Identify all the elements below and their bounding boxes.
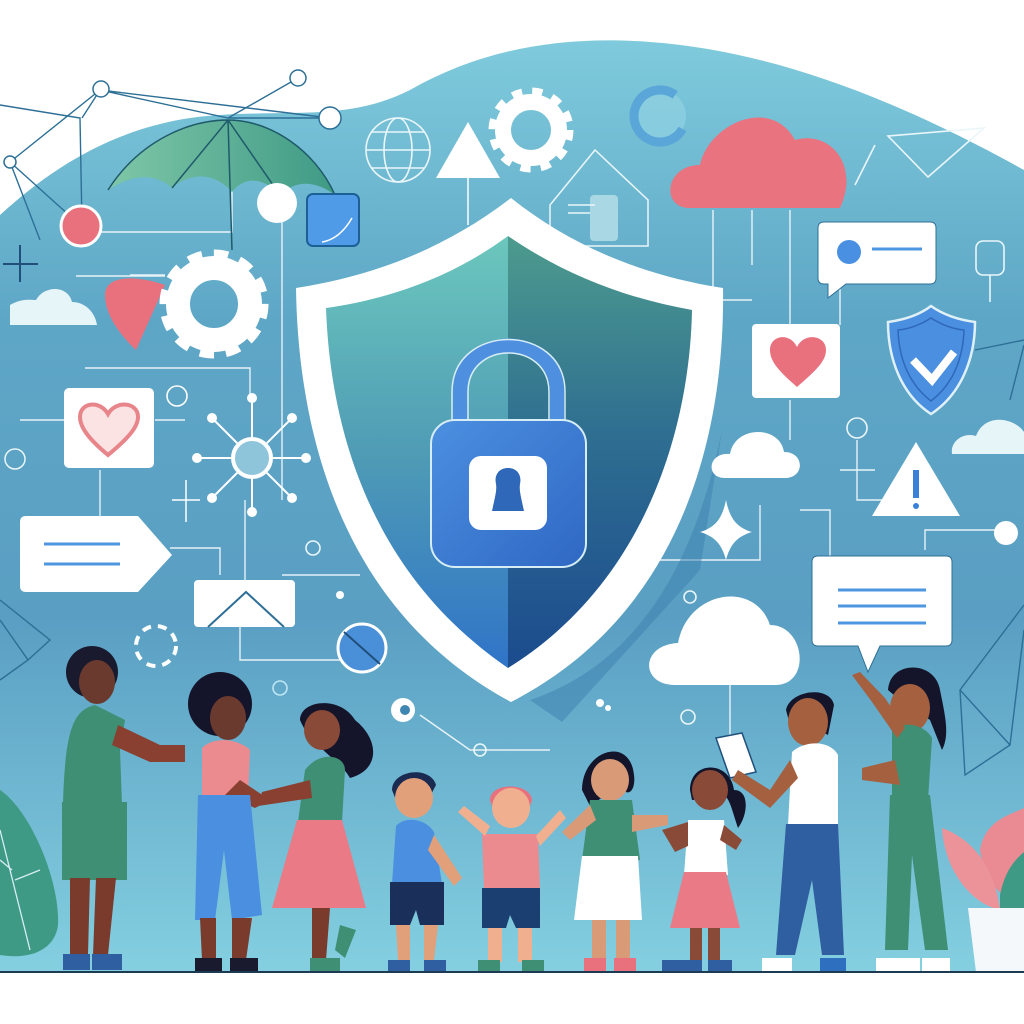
person 3: [258, 703, 373, 972]
icon: large gear: [165, 255, 263, 353]
child 2: [458, 786, 566, 972]
child 4: [662, 768, 746, 972]
icon: ring node: [840, 418, 875, 470]
panel: arrow message card: [20, 516, 172, 592]
man with tablet: [716, 692, 846, 972]
icon: small specks: [336, 591, 611, 711]
icon: crescent ring: [624, 80, 696, 152]
ground line: [0, 971, 1024, 973]
icon: triangle: [436, 122, 500, 225]
icon: small plus: [172, 480, 200, 522]
icon: red node: [61, 206, 101, 246]
network nodes: [4, 70, 341, 168]
icon: no sign: [338, 624, 386, 672]
child 3: [562, 751, 668, 972]
shield shadow: [530, 430, 722, 722]
panel: lines speech bubble: [812, 556, 952, 672]
icon: dashed gear: [136, 626, 176, 666]
icon: globe: [366, 118, 430, 182]
shield right half: [508, 236, 692, 668]
icon: house outline: [550, 150, 648, 246]
icon: envelope: [194, 580, 295, 627]
icon: cross sparkle: [3, 245, 38, 282]
icon: small shield: [888, 306, 975, 414]
icon: warning triangle: [872, 442, 960, 516]
icon: at sign: [391, 698, 415, 722]
icon: right cloud: [952, 420, 1024, 454]
person 2: [188, 672, 270, 972]
panel: heart bubble: [752, 324, 840, 398]
panel: heart card: [64, 388, 154, 468]
shield frame: [296, 198, 723, 702]
icon: paper plane: [855, 128, 984, 185]
icon: small gear: [493, 92, 569, 168]
icon: four point star: [700, 500, 752, 560]
icon: white dot: [994, 521, 1018, 545]
child 1: [388, 772, 462, 972]
icon: white cloud mid right: [712, 432, 800, 478]
shield: [296, 198, 723, 722]
icon: bottom left ring: [5, 449, 25, 469]
panel: speech bubble top right: [818, 222, 936, 298]
person 1: [62, 646, 185, 970]
icon: white circle: [257, 183, 297, 223]
icon: left cloud: [10, 289, 97, 325]
padlock: [431, 340, 586, 567]
shield left half: [326, 236, 508, 668]
icon: pink heart: [105, 278, 165, 350]
scene: plants: [0, 790, 1024, 972]
network lines: [0, 78, 1024, 775]
icon: small ring: [167, 386, 187, 406]
icon: small rings: [273, 541, 696, 756]
icon: hub node: [193, 394, 310, 516]
icon: umbrella: [108, 120, 335, 250]
icon: pink cloud: [670, 118, 846, 208]
icon: blue square: [307, 194, 359, 246]
woman in green: [852, 668, 950, 972]
icon: large white cloud: [649, 597, 800, 685]
icon: plug outline: [976, 241, 1004, 302]
